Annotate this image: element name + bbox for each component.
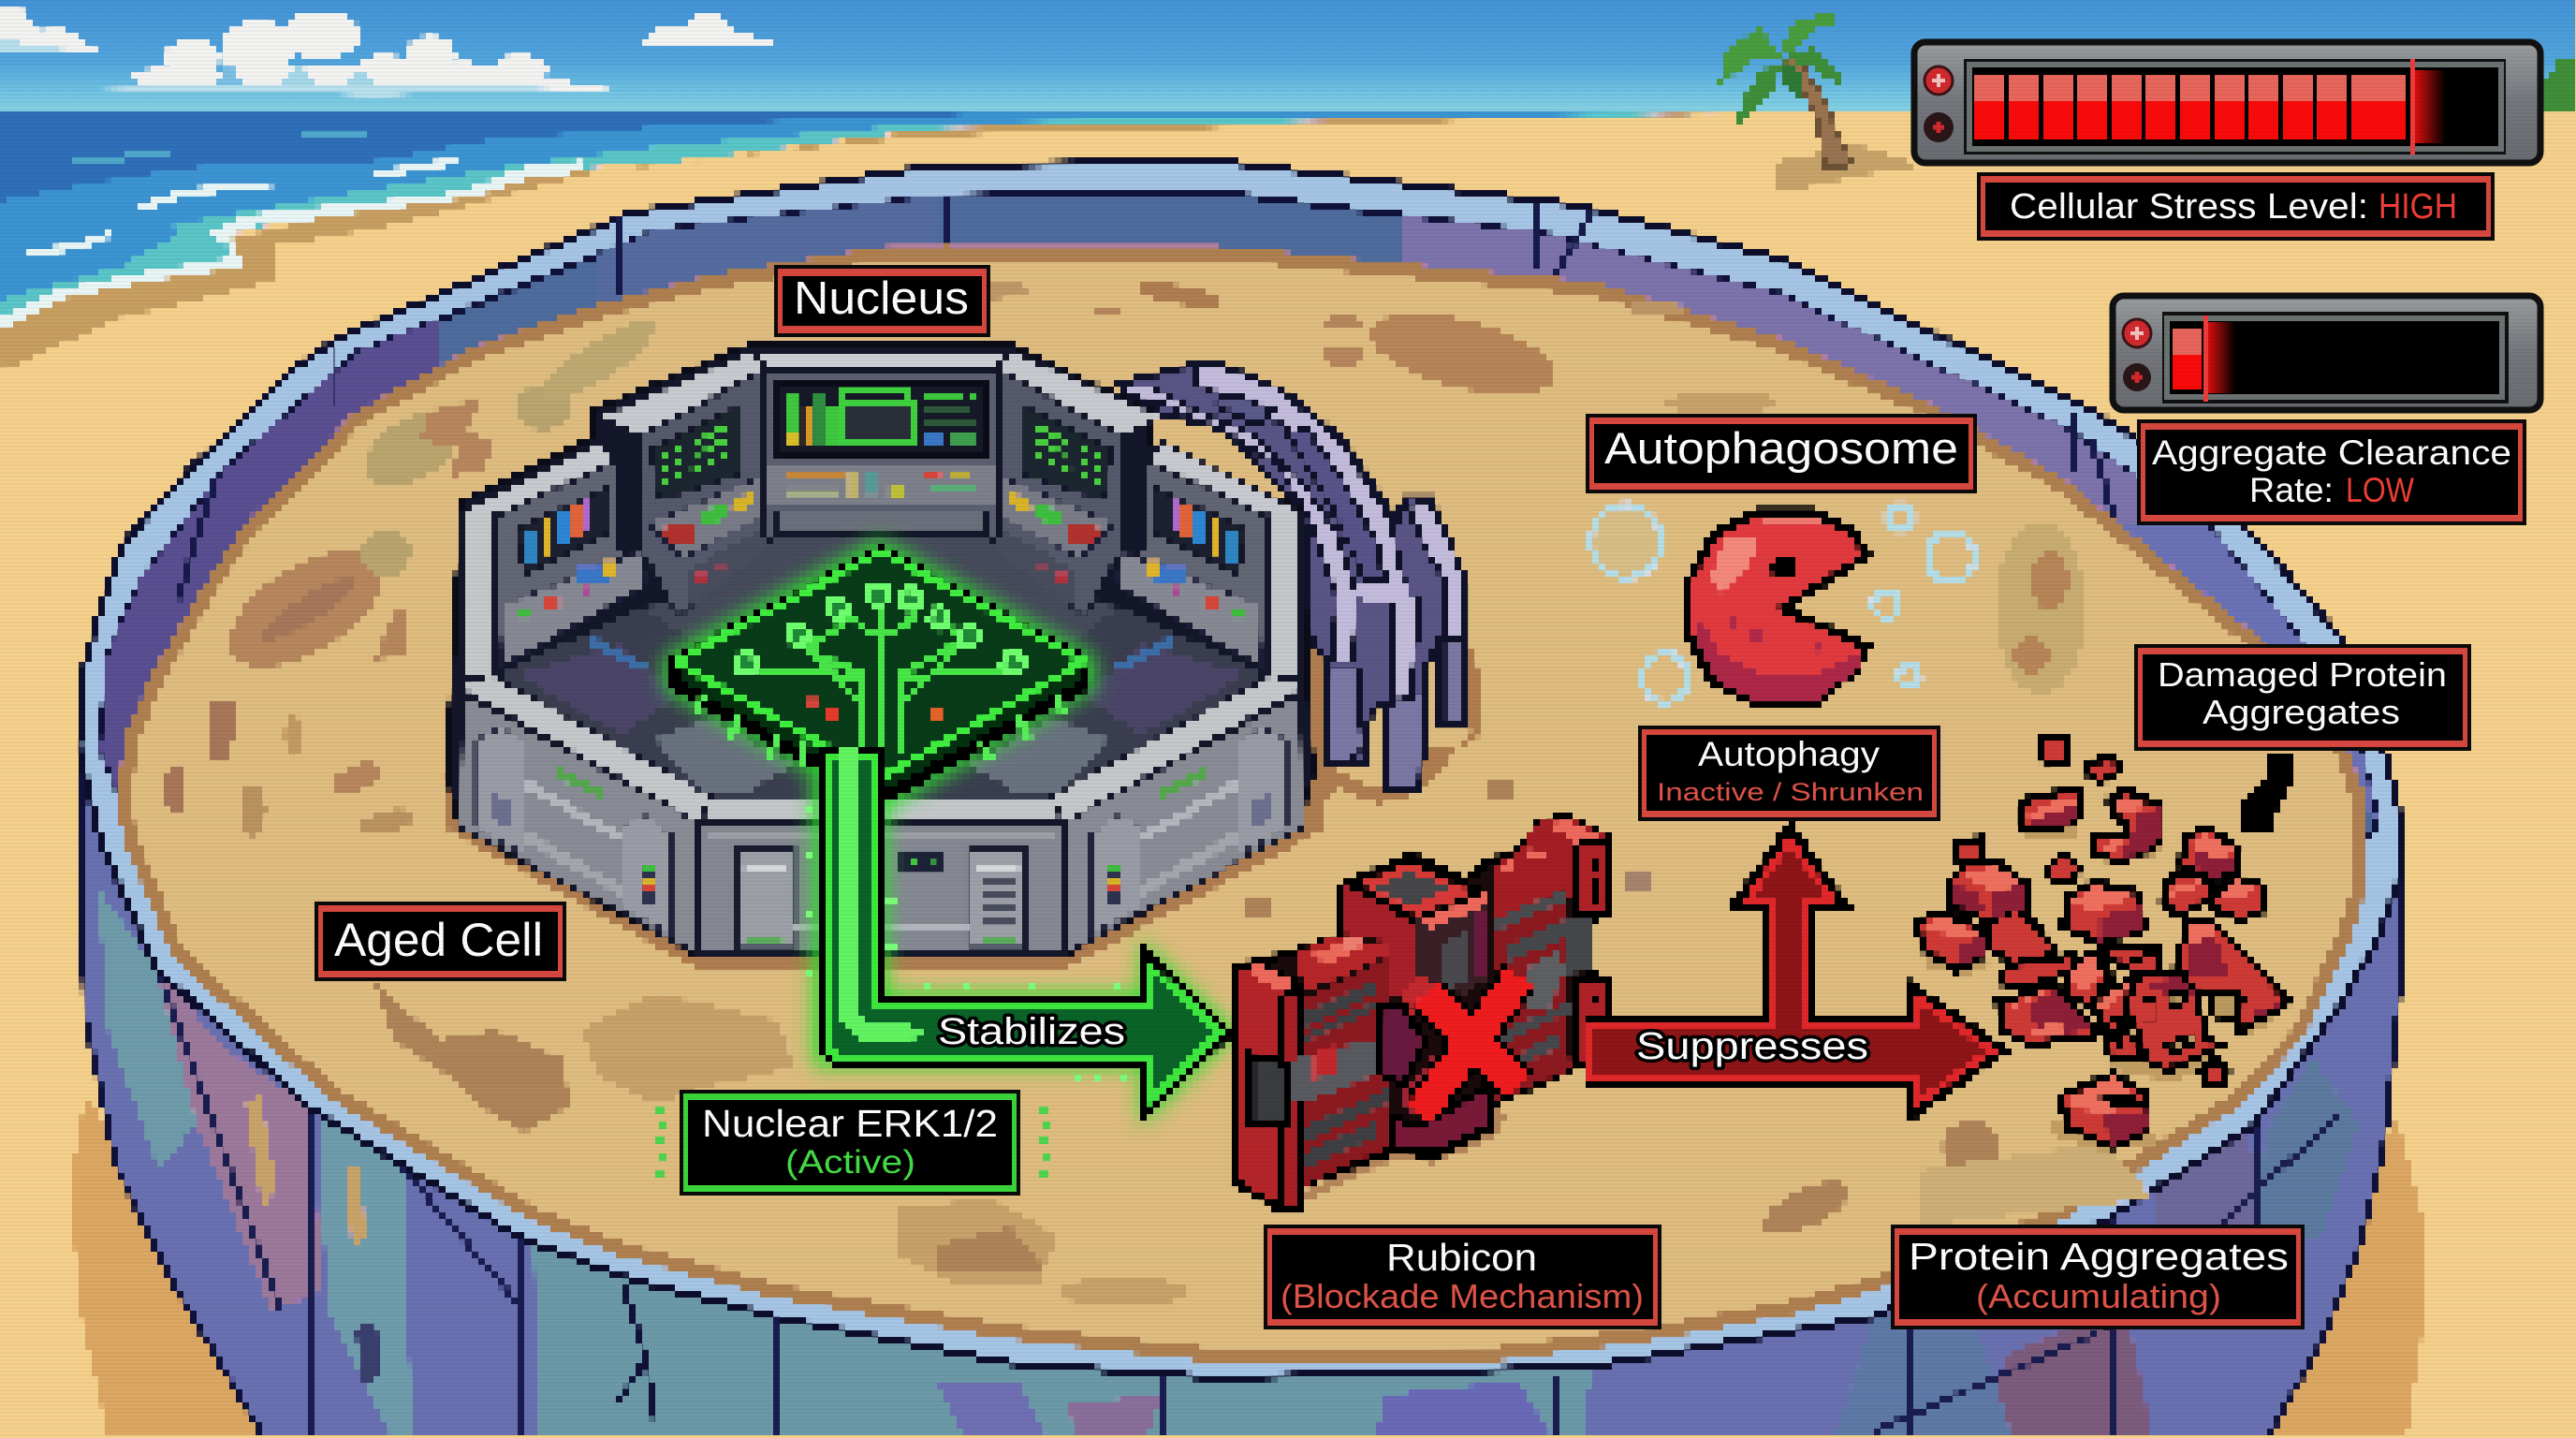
green glow [675, 550, 1226, 1108]
label: cellular stress level [1977, 172, 2495, 241]
arrow label: stabilizes: Stabilizes [938, 1011, 1125, 1052]
nucleus: octagonal control chamber [442, 345, 1321, 969]
nucleus: purple ribs behind the chamber [1120, 364, 1481, 814]
label: autophagy [1638, 726, 1940, 821]
rim top strip [79, 161, 2402, 1378]
label: aggregate clearance rate: LOW [2346, 471, 2414, 509]
label: damaged protein aggregates [2134, 644, 2471, 751]
label: aggregate clearance rate: Aggregate Clearance [2152, 433, 2511, 472]
label: rubicon: (Blockade Mechanism) [1281, 1277, 1644, 1315]
label: autophagosome: Autophagosome [1604, 423, 1958, 473]
wet sand [0, 112, 1778, 372]
arrow label: suppresses: Suppresses [1636, 1024, 1868, 1067]
sky [0, 0, 2576, 114]
label: nuclear ERK1/2: (Active) [785, 1144, 915, 1181]
label: rubicon [1264, 1225, 1661, 1329]
clearance gauge [2113, 296, 2540, 410]
black pointer arrow [2239, 752, 2296, 831]
rubicon blockade block [1217, 817, 1607, 1214]
label: autophagy: Autophagy [1698, 735, 1881, 773]
clearance gauge red segment [2173, 329, 2202, 389]
green arrow: stabilizes [805, 749, 1226, 1108]
floor brown edge [124, 253, 2361, 1356]
label: nuclear ERK1/2 [680, 1090, 1020, 1196]
label: cellular stress level: Cellular Stress Level: [2010, 187, 2368, 227]
label: nucleus [774, 265, 990, 337]
stress gauge [1914, 42, 2540, 163]
palm tree [1718, 13, 1852, 169]
stress gauge red segments [1974, 75, 2406, 139]
clearance gauge buttons [2123, 319, 2151, 391]
hill at the right edge [2543, 56, 2576, 112]
clouds [0, 7, 788, 95]
sparkles beside the ERK label [655, 1107, 1050, 1178]
label: aggregate clearance rate: Rate: [2249, 471, 2334, 509]
nuclear ERK1/2 chip [675, 551, 1084, 799]
label: protein aggregates [1891, 1225, 2305, 1329]
bubbles [1591, 505, 1974, 702]
outer wall [79, 655, 2404, 1438]
label: autophagosome [1586, 414, 1977, 493]
label: cellular stress level: HIGH [2378, 187, 2457, 227]
label: nuclear ERK1/2: Nuclear ERK1/2 [702, 1102, 998, 1145]
label: protein aggregates: (Accumulating) [1976, 1277, 2221, 1315]
label: aged cell: Aged Cell [334, 914, 543, 966]
red arrow: suppresses [1588, 828, 2002, 1114]
label: rubicon: Rubicon [1386, 1236, 1537, 1279]
label: damaged protein aggregates: Aggregates [2203, 693, 2400, 731]
inner wall face [101, 192, 2378, 843]
label: damaged protein aggregates: Damaged Protein [2158, 655, 2447, 694]
label: autophagy: Inactive / Shrunken [1657, 778, 1924, 806]
floor patches [164, 278, 2153, 1307]
label: aged cell [315, 902, 566, 981]
label: aggregate clearance rate [2137, 419, 2526, 525]
label: protein aggregates: Protein Aggregates [1909, 1235, 2289, 1278]
wall ground shadow [70, 1095, 281, 1438]
label: nucleus: Nucleus [794, 273, 969, 324]
stress gauge buttons [1924, 66, 1954, 142]
palm tree shadow [1778, 145, 1917, 190]
ocean [0, 112, 1825, 325]
autophagosome: pacman shape [1689, 512, 1867, 705]
damaged protein aggregates: debris [1917, 737, 2291, 1152]
